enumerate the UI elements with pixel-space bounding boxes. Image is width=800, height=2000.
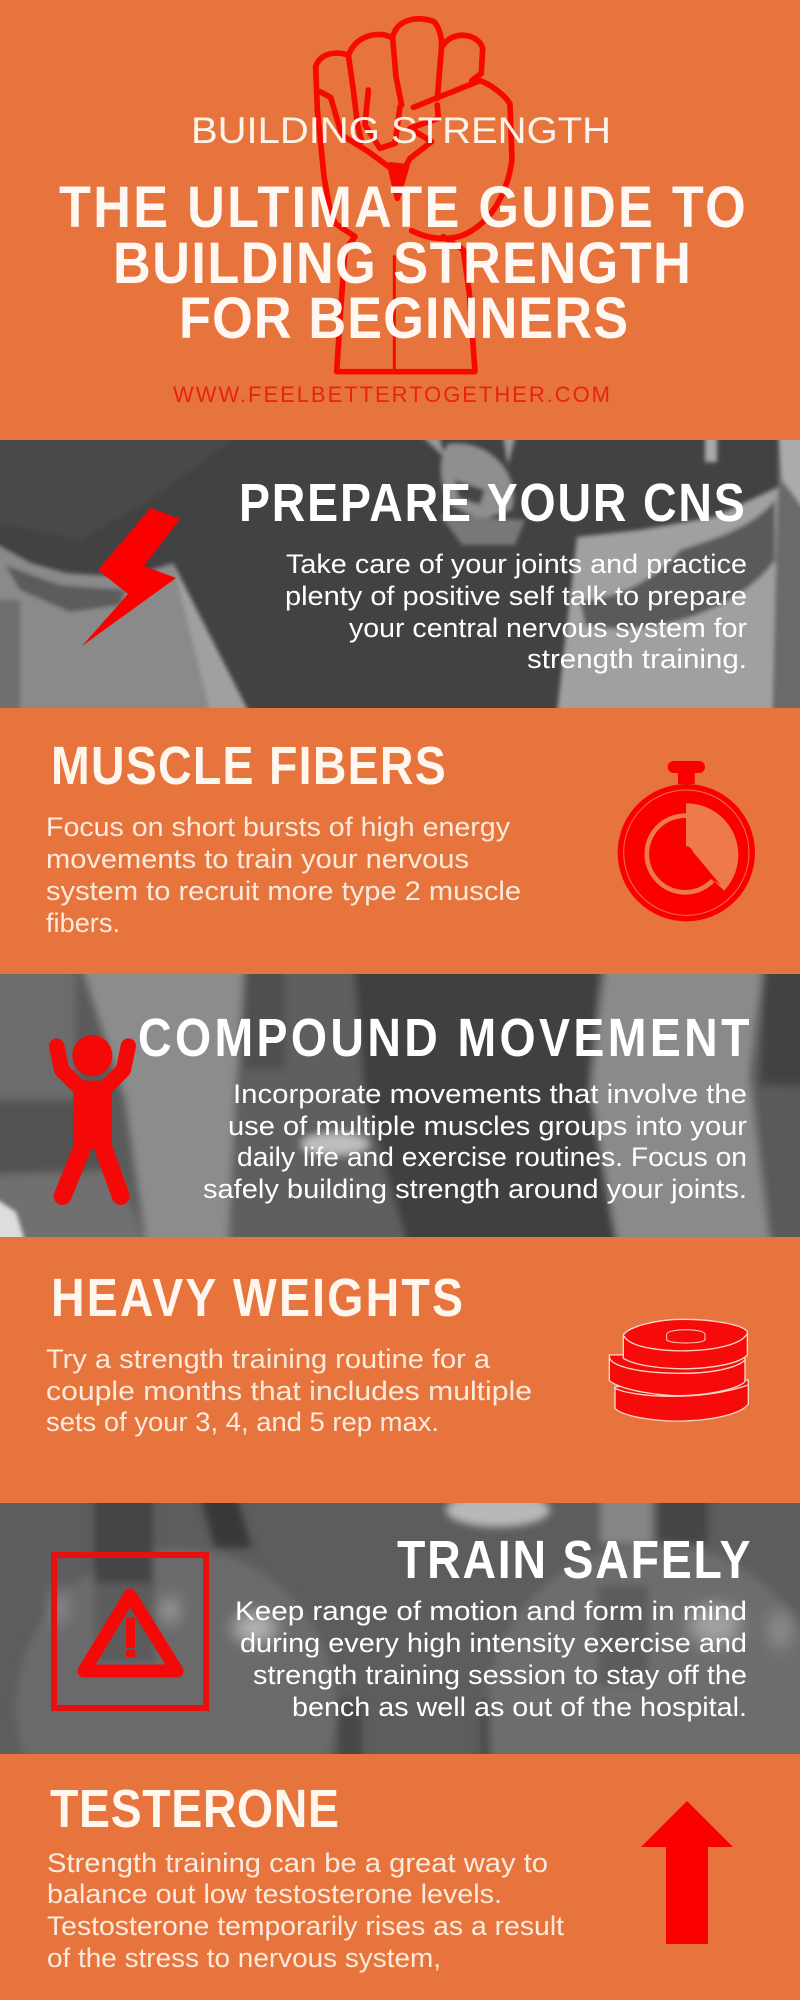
panel: heavy weights — [46, 1267, 748, 1437]
heading: COMPOUND MOVEMENT — [138, 1007, 750, 1068]
body text: during every high intensity exercise and — [240, 1628, 747, 1658]
body text: balance out low testosterone levels. — [47, 1879, 502, 1909]
icon: raised fist — [316, 19, 512, 372]
panel: compound movement — [0, 974, 800, 1237]
heading: TRAIN SAFELY — [397, 1529, 750, 1590]
icon: person with raised arms — [57, 1035, 128, 1196]
icon: stacked weight plates — [609, 1319, 748, 1421]
body text: Incorporate movements that involve the — [233, 1079, 747, 1109]
photo background: legs — [0, 974, 800, 1237]
body text: movements to train your nervous — [46, 844, 469, 874]
body text: Keep range of motion and form in mind — [235, 1596, 747, 1626]
body text: strength training session to stay off the — [253, 1660, 747, 1690]
body text: fibers. — [46, 908, 120, 938]
website url: WWW.FEELBETTERTOGETHER.COM — [173, 382, 610, 407]
body text: your central nervous system for — [349, 613, 747, 643]
icon: up arrow — [641, 1801, 733, 1944]
panel: testerone — [47, 1778, 733, 1973]
body text: sets of your 3, 4, and 5 rep max. — [46, 1407, 439, 1437]
body text: Focus on short bursts of high energy — [46, 812, 511, 842]
photo background: kettlebells — [0, 1503, 800, 1754]
body text: use of multiple muscles groups into your — [228, 1111, 747, 1141]
body text: safely building strength around your joints. — [203, 1174, 747, 1204]
icon: lightning bolt — [82, 508, 180, 646]
body text: couple months that includes multiple — [46, 1376, 532, 1406]
body text: Strength training can be a great way to — [47, 1848, 548, 1878]
title: BUILDING STRENGTH — [113, 230, 691, 296]
body text: Take care of your joints and practice — [286, 549, 747, 579]
heading: HEAVY WEIGHTS — [51, 1267, 463, 1328]
body text — [203, 1079, 747, 1204]
body text: of the stress to nervous system, — [47, 1943, 441, 1973]
panel: muscle fibers — [46, 735, 755, 938]
icon: warning triangle in square — [54, 1555, 206, 1708]
body text: bench as well as out of the hospital. — [292, 1692, 747, 1722]
title: FOR BEGINNERS — [179, 285, 628, 351]
body text: Testosterone temporarily rises as a result — [47, 1911, 565, 1941]
heading: MUSCLE FIBERS — [51, 735, 446, 796]
body text — [235, 1596, 747, 1722]
body text: plenty of positive self talk to prepare — [285, 581, 747, 611]
heading: TESTERONE — [50, 1778, 339, 1839]
icon: stopwatch — [618, 761, 755, 921]
body text: Try a strength training routine for a — [46, 1344, 491, 1374]
title — [59, 174, 746, 351]
panel: prepare your CNS — [0, 440, 800, 708]
photo background: torso and thighs — [0, 440, 800, 708]
body text — [47, 1848, 565, 1973]
body text: daily life and exercise routines. Focus on — [237, 1142, 747, 1172]
body text: system to recruit more type 2 muscle — [46, 876, 521, 906]
title: THE ULTIMATE GUIDE TO — [59, 174, 746, 240]
heading: PREPARE YOUR CNS — [239, 472, 745, 533]
panel: train safely — [0, 1503, 800, 1754]
body text: strength training. — [527, 644, 747, 674]
body text — [46, 1344, 532, 1437]
subtitle: BUILDING STRENGTH — [191, 110, 611, 151]
panel: header — [59, 19, 746, 407]
body text — [46, 812, 521, 938]
body text — [285, 549, 747, 674]
